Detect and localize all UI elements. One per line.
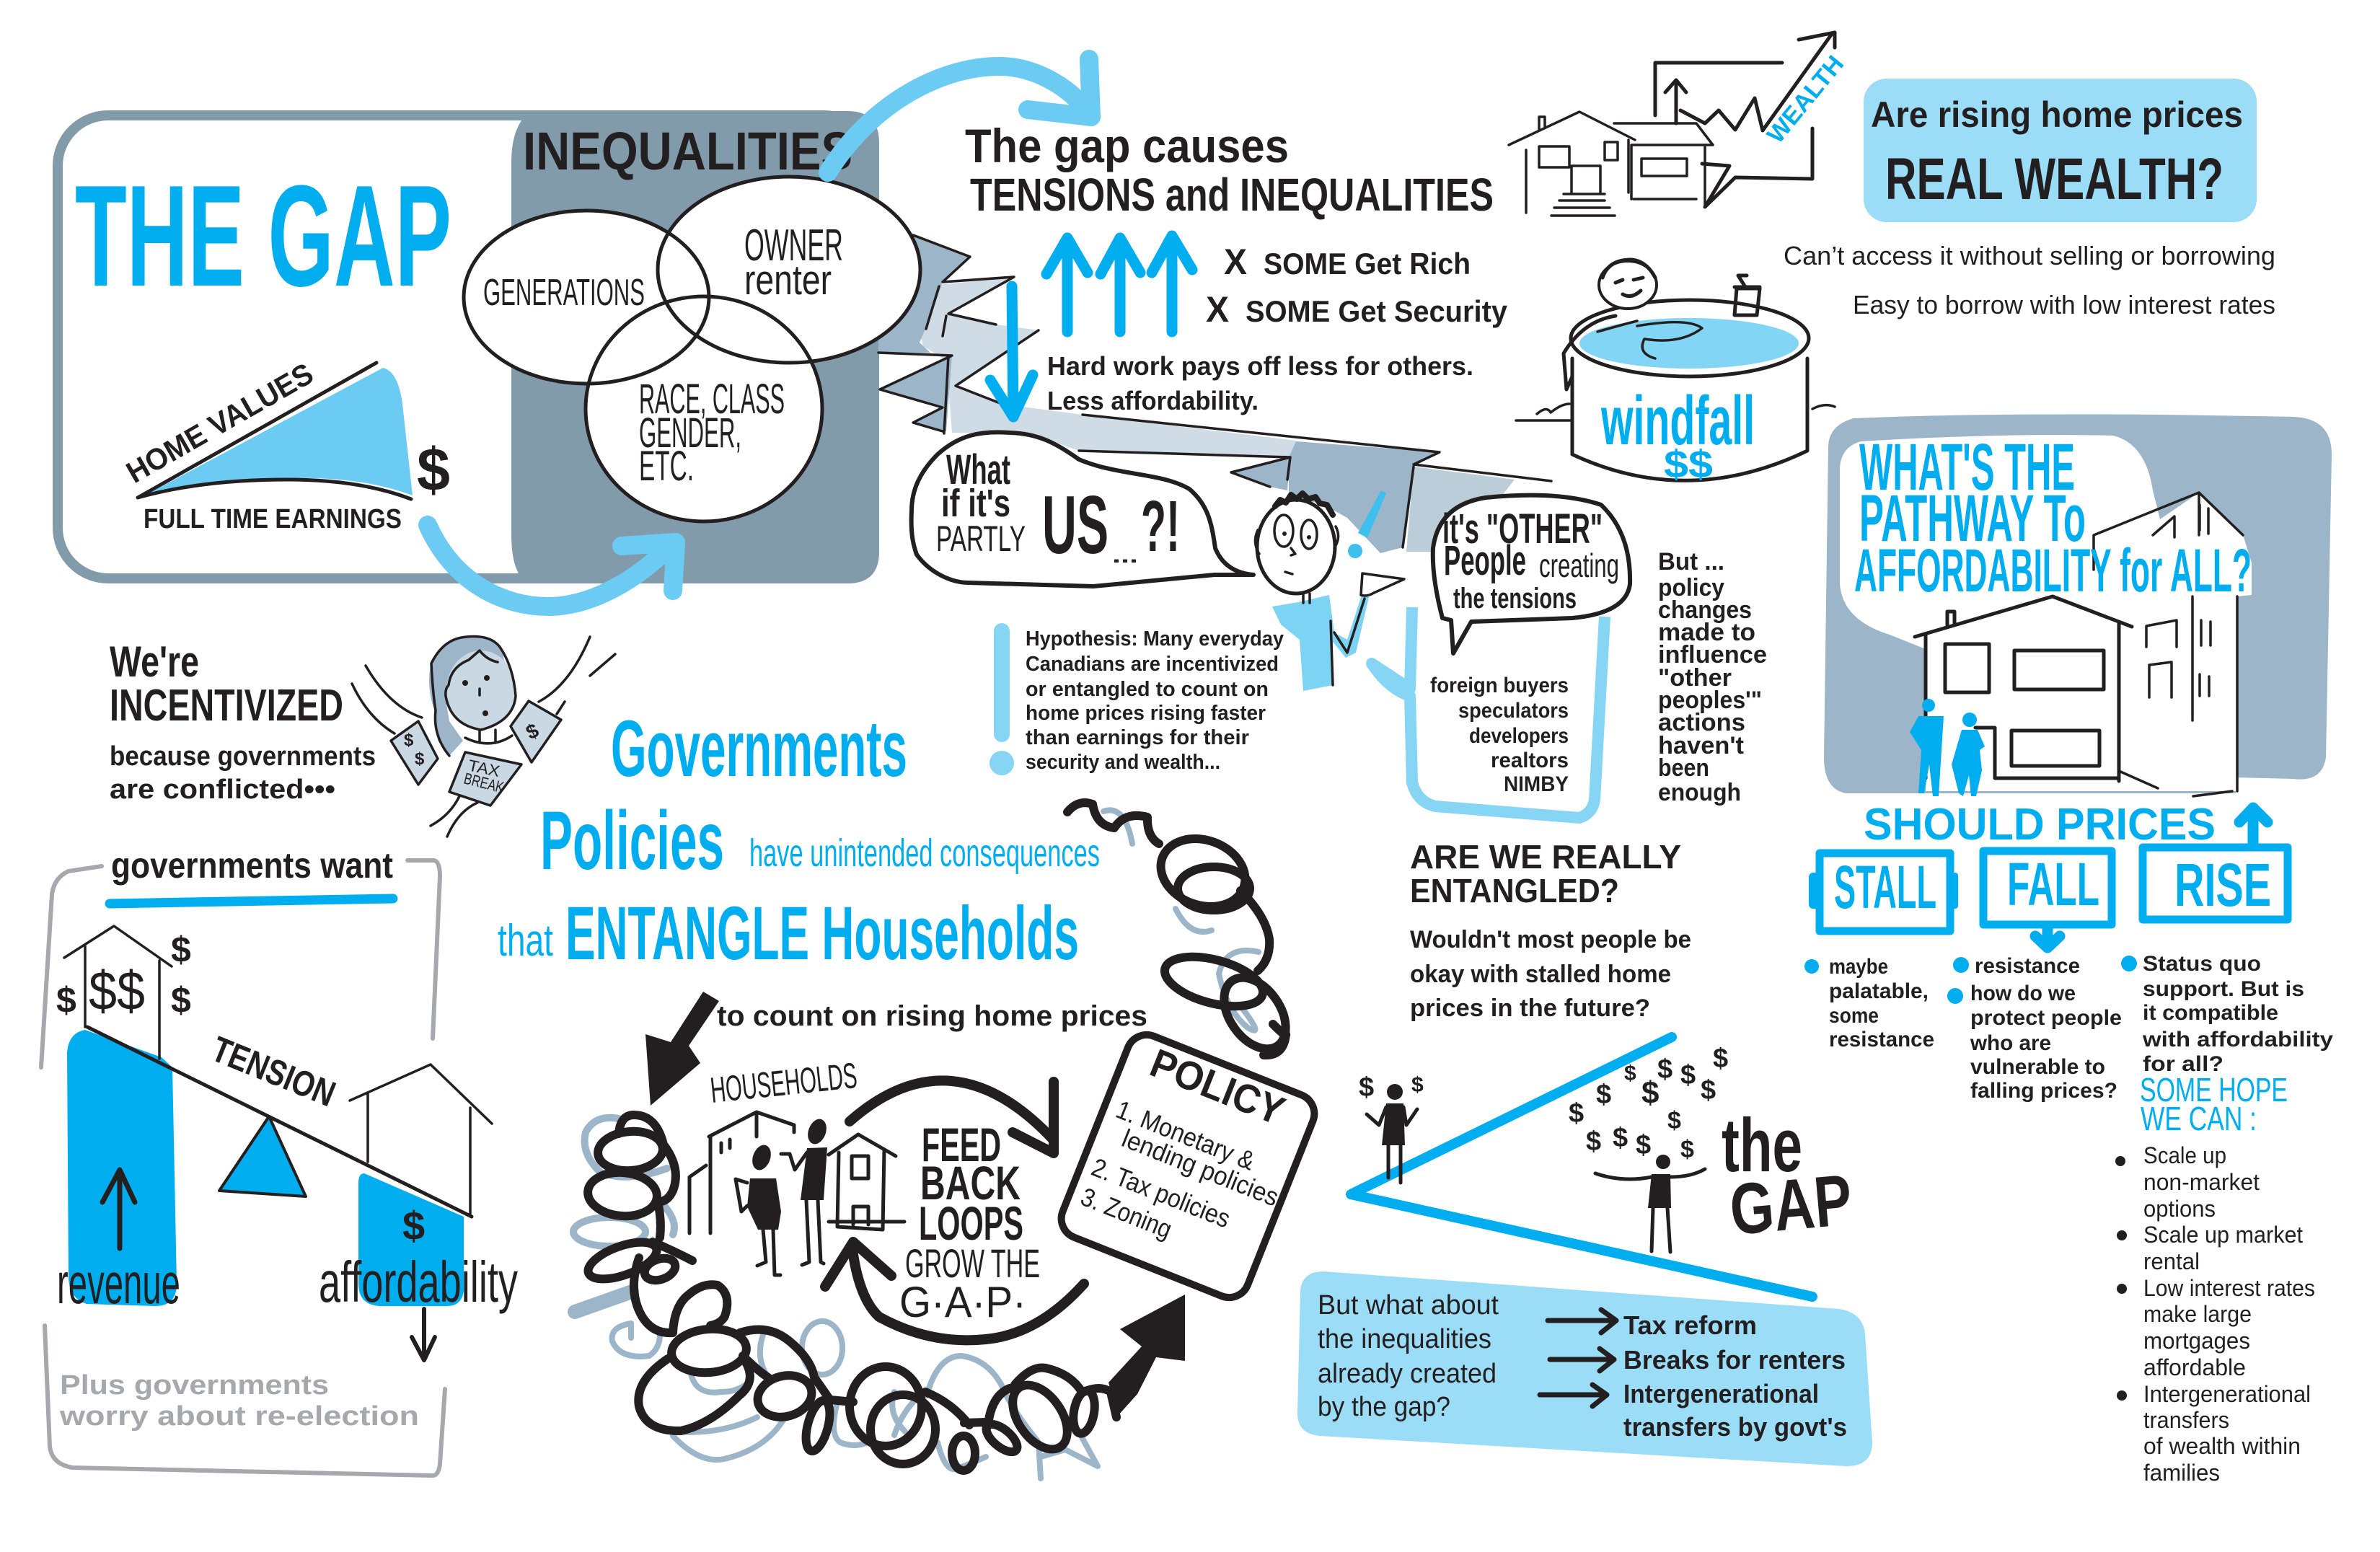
heading: governments policies entangle households: have unintended consequences — [749, 832, 1100, 875]
text: we're incentivized: are conflicted••• — [110, 775, 335, 805]
text: hard work: Less affordability. — [1047, 386, 1259, 415]
text: we're incentivized: INCENTIVIZED — [110, 681, 343, 731]
text: but policy changes: peoples'" — [1658, 687, 1762, 714]
panel: pathway to affordability — [1824, 414, 2332, 796]
list: other people: NIMBY — [1504, 772, 1569, 796]
label: the gap: the — [1722, 1103, 1802, 1188]
text: wealth notes — [1784, 241, 2275, 319]
list: stall notes: resistance — [1829, 1028, 1934, 1051]
arrow: policy to households — [645, 992, 719, 1106]
heading: governments policies entangle households: ENTANGLE Households — [565, 891, 1079, 976]
box: fall: FALL — [2007, 850, 2099, 918]
house and wealth illustration — [1509, 32, 1849, 216]
list: fall notes — [1947, 954, 2122, 1103]
icon: big person with dollars: $ — [1624, 1062, 1636, 1085]
bar: affordability — [358, 1173, 464, 1306]
heading: are we really entangled: ARE WE REALLY — [1410, 838, 1681, 876]
icon: dollar sign: $ — [417, 436, 450, 503]
speech bubble: it's other people: People — [1444, 537, 1526, 584]
text: hypothesis: or entangled to count on — [1026, 678, 1269, 701]
illustration: small house — [829, 1134, 904, 1230]
list: rise notes: Status quo — [2143, 952, 2261, 976]
label: windfall: windfall — [1600, 382, 1755, 459]
text: hypothesis: than earnings for their — [1026, 726, 1249, 749]
illustration: gray scribbles — [573, 810, 1259, 1478]
chart: tilted beam — [87, 1027, 472, 1217]
icon: hair and face — [1603, 260, 1655, 296]
list: some get rich: SOME Get Rich — [1264, 247, 1471, 281]
icon: person in tub — [1599, 261, 1657, 309]
icon: big person with dollars: $ — [1657, 1054, 1672, 1085]
speech bubble: what if it's us: ?! — [1141, 486, 1180, 567]
heading: some hope we can: WE CAN : — [2141, 1100, 2257, 1137]
icon: house with dollars: $ — [56, 980, 76, 1020]
panel frame — [41, 860, 445, 1476]
heading: governments want: governments want — [111, 845, 393, 886]
box: rise: RISE — [2174, 851, 2271, 919]
box: fall — [1983, 850, 2112, 948]
text: wealth notes: Easy to borrow with low interest rates — [1853, 290, 2275, 319]
list: fall notes: resistance — [1975, 954, 2080, 978]
list: other people: speculators — [1458, 699, 1569, 723]
icon: small person: $ — [1411, 1073, 1424, 1097]
label: race, class, gender: GENDER, — [639, 410, 741, 457]
icon: arm on tub rim — [1564, 316, 1616, 389]
list: some get rich: SOME Get Security — [1246, 294, 1508, 328]
heading: the gap: THE GAP — [75, 156, 451, 317]
illustration: black tangle — [583, 803, 1298, 1471]
heading: the gap causes tensions: TENSIONS and INEQUALITIES — [970, 169, 1494, 221]
label: generations: GENERATIONS — [483, 272, 645, 314]
illustration: buildings — [689, 1112, 794, 1233]
heading: what's the pathway — [1854, 431, 2252, 604]
list: some get rich: X — [1206, 289, 1229, 330]
text: but policy changes: made to — [1658, 619, 1755, 646]
text: wealth notes: Can’t access it without selling or borrowing — [1784, 241, 2275, 270]
icon: exclamation mark — [990, 623, 1014, 775]
panel: inequalities background — [511, 111, 879, 583]
list: rise notes: it compatible — [2143, 1001, 2278, 1025]
icon: drink — [1735, 275, 1760, 315]
box: rise — [2143, 847, 2288, 920]
arrow: gap to inequalities — [428, 525, 676, 607]
heading: governments policies entangle households: Governments — [611, 705, 907, 793]
panel frame — [58, 115, 874, 578]
crack illustration — [878, 235, 1551, 553]
callout: inequalities already created: But what about — [1318, 1290, 1499, 1320]
label: renter: renter — [744, 257, 832, 304]
callout: inequalities already created: Intergenerational — [1623, 1379, 1819, 1408]
icon: triangle fulcrum — [219, 1116, 306, 1196]
panel: governments want balance — [41, 845, 518, 1476]
label: race, class, gender: RACE, CLASS — [639, 376, 785, 423]
list: fall notes: falling prices? — [1970, 1079, 2117, 1103]
list: hope measures: Intergenerational — [2143, 1381, 2311, 1407]
label: wealth: WEALTH — [1762, 50, 1849, 149]
text: re-election: worry about re-election — [59, 1401, 419, 1432]
text: re-election — [59, 1370, 419, 1432]
label: revenue: revenue — [57, 1251, 180, 1315]
callout: inequalities already created: Tax reform — [1623, 1310, 1757, 1340]
icon: big person with dollars: $ — [1701, 1075, 1716, 1106]
heading: some hope we can: SOME HOPE — [2140, 1071, 2288, 1108]
icon: up arrow — [102, 1170, 135, 1248]
icon: small person: $ — [1359, 1072, 1374, 1103]
heading: what's the pathway: WHAT'S THE — [1859, 431, 2075, 504]
text: feedback loops grow the gap: BACK — [920, 1156, 1021, 1209]
list: hope measures — [2115, 1142, 2315, 1486]
text: hypothesis: Canadians are incentivized — [1026, 653, 1279, 676]
label: race, class, gender: ETC. — [639, 443, 694, 490]
icon: right money — [511, 701, 561, 762]
arrow: inequalities to tensions — [828, 59, 1091, 172]
icon: tax break paper: BREAK — [462, 770, 506, 796]
icon: big person with dollars: $ — [1667, 1107, 1681, 1134]
illustration: tall building — [2094, 493, 2243, 796]
illustration: house — [1915, 596, 2132, 781]
speech bubble: it's other people: the tensions — [1453, 583, 1577, 614]
text: but policy changes: haven't — [1658, 732, 1744, 759]
list: hope measures: non-market — [2143, 1169, 2260, 1195]
text: we're incentivized: because governments — [110, 741, 376, 772]
text: but policy changes: policy — [1658, 574, 1724, 601]
text: hard work: Hard work pays off less for others. — [1047, 351, 1473, 381]
callout: inequalities already created: transfers by govt's — [1623, 1412, 1847, 1442]
icon: house with dollars: $ — [171, 980, 191, 1020]
list: stall notes: maybe — [1829, 955, 1888, 979]
text: feedback loops grow the gap — [899, 1118, 1040, 1326]
callout: inequalities already created — [1297, 1271, 1872, 1466]
text: we're incentivized: We're — [110, 638, 199, 686]
list: hope measures: Scale up — [2143, 1142, 2226, 1168]
callout: inequalities already created: the inequalities — [1318, 1324, 1491, 1354]
speech bubble: what if it's us: PARTLY — [936, 519, 1026, 559]
list: other people — [1430, 674, 1569, 796]
icon: house with dollars: $ — [171, 930, 191, 970]
label: owner: OWNER — [744, 221, 843, 270]
list: policies: 2. Tax policies — [1088, 1152, 1235, 1233]
text: but policy changes: been — [1658, 754, 1709, 782]
icon: two people — [1910, 699, 1985, 796]
heading: governments policies entangle households: that — [498, 916, 553, 966]
heading: the gap causes tensions: The gap causes — [965, 119, 1289, 172]
icon: big person with dollars: $ — [1680, 1136, 1694, 1163]
text: hypothesis — [1026, 627, 1284, 774]
list: hope measures: mortgages — [2143, 1328, 2250, 1354]
speech bubble: it's other people: it's "OTHER" — [1442, 506, 1603, 552]
list: policies — [1077, 1094, 1283, 1244]
icon: big person with dollars: $ — [1641, 1075, 1659, 1111]
speech bubble: what if it's us: What — [946, 446, 1010, 493]
arrow: fall down — [2035, 926, 2060, 948]
box: stall — [1809, 853, 1958, 931]
icon: right money: $ — [522, 719, 542, 744]
text: feedback loops grow the gap: LOOPS — [919, 1196, 1023, 1250]
text: hypothesis: home prices rising faster — [1026, 702, 1266, 725]
text: feedback loops grow the gap: G·A·P· — [899, 1278, 1026, 1326]
label: households: HOUSEHOLDS — [708, 1055, 859, 1111]
text: re-election: Plus governments — [60, 1370, 329, 1401]
box: stall: STALL — [1834, 853, 1936, 921]
text: we're incentivized — [110, 638, 376, 805]
icon: big person with dollars — [1569, 1044, 1728, 1252]
list: other people: developers — [1469, 724, 1569, 748]
panel: policy card — [1055, 1029, 1321, 1303]
icon: arrows to remedies — [1540, 1310, 1616, 1406]
callout: are rising home prices real wealth: REAL WEALTH? — [1885, 146, 2223, 212]
panel: venn diagram — [464, 177, 920, 521]
icon: big person with dollars: $ — [1596, 1080, 1611, 1110]
speech bubble: what if it's us — [912, 432, 1253, 586]
speech bubble: other people list — [1372, 607, 1605, 818]
text: but policy changes: changes — [1658, 596, 1752, 624]
heading: are we really entangled — [1410, 838, 1681, 909]
text: but policy changes: "other — [1658, 664, 1732, 692]
icon: tax break paper — [449, 752, 521, 806]
text: but policy changes: influence — [1658, 641, 1767, 669]
list: rise notes: for all? — [2143, 1052, 2223, 1076]
label: tension: TENSION — [206, 1028, 341, 1114]
icon: big person with dollars: $ — [1613, 1123, 1628, 1153]
list: hope measures: Scale up market — [2143, 1222, 2303, 1248]
text: but policy changes: But ... — [1658, 548, 1724, 576]
list: stall notes: palatable, — [1829, 979, 1929, 1003]
text: stalled prices question: Wouldn't most people be — [1410, 926, 1691, 953]
arrow: rise up — [2239, 808, 2267, 845]
callout: inequalities already created: already created — [1318, 1359, 1497, 1389]
heading: inequalities: INEQUALITIES — [523, 121, 852, 181]
speech bubble: it's other people — [1433, 495, 1630, 653]
list: rise notes: support. But is — [2143, 977, 2304, 1001]
chart: home values versus full time earnings — [120, 356, 450, 534]
text: stalled prices question: okay with stalled home — [1410, 961, 1671, 988]
label: dollars: $$ — [1664, 443, 1713, 486]
icon: tax break paper: TAX — [467, 756, 502, 780]
heading: governments policies entangle households: Policies — [540, 795, 724, 887]
list: policies: 3. Zoning — [1077, 1181, 1176, 1244]
text: feedback loops grow the gap: FEED — [922, 1118, 1001, 1171]
icon: house with dollars: $$ — [89, 961, 145, 1022]
text: to count on rising home prices: to count on rising home prices — [717, 1000, 1147, 1032]
list: other people: realtors — [1491, 749, 1569, 772]
text: hard work — [1047, 351, 1473, 415]
heading: some hope we can — [2140, 1071, 2288, 1137]
label: race, class, gender — [639, 376, 785, 490]
list: hope measures: make large — [2143, 1301, 2252, 1327]
text: feedback loops grow the gap: GROW THE — [905, 1240, 1040, 1286]
list: hope measures: families — [2143, 1460, 2220, 1486]
list: stall notes — [1804, 955, 1934, 1051]
list: fall notes: protect people — [1970, 1006, 2122, 1030]
panel: the gap and inequalities — [58, 111, 879, 583]
list: fall notes: vulnerable to — [1970, 1055, 2105, 1079]
icon: big person with dollars: $ — [1586, 1126, 1601, 1157]
list: hope measures: affordable — [2143, 1354, 2246, 1380]
speech bubble: it's other people: creating — [1539, 547, 1619, 584]
illustration: confused person — [1255, 490, 1404, 691]
label: the gap: GAP — [1727, 1160, 1855, 1251]
label: the gap — [1722, 1103, 1855, 1251]
list: hope measures: of wealth within — [2143, 1433, 2301, 1459]
label: affordability: affordability — [319, 1250, 518, 1314]
text: but policy changes: actions — [1658, 709, 1745, 736]
heading: policy: POLICY — [1145, 1040, 1291, 1134]
icon: big person with dollars: $ — [1713, 1044, 1728, 1074]
list: some get rich — [1206, 242, 1508, 330]
list: hope measures: rental — [2143, 1248, 2200, 1274]
illustration: windfall hot tub — [1516, 260, 1835, 486]
illustration: woman with tax breaks — [352, 637, 615, 837]
list: rise notes: with affordability — [2142, 1028, 2333, 1051]
list: policies: lending policies — [1118, 1123, 1283, 1212]
list: hope measures: options — [2143, 1196, 2216, 1222]
list: policies: 1. Monetary & — [1112, 1094, 1259, 1176]
icon: big person with dollars: $ — [1636, 1130, 1651, 1160]
list: hope measures: Low interest rates — [2143, 1275, 2315, 1301]
icon: empty house — [350, 1064, 492, 1214]
list: fall notes: who are — [1970, 1031, 2051, 1055]
icon: left money: $ — [415, 749, 425, 769]
speech bubble: what if it's us: if it's — [941, 482, 1010, 525]
arrows: feedback loop — [825, 1080, 1084, 1340]
icon: down arrow — [990, 286, 1033, 417]
list: stall notes: some — [1829, 1004, 1879, 1028]
text: stalled prices question — [1410, 926, 1691, 1022]
heading: are we really entangled: ENTANGLED? — [1410, 872, 1619, 909]
callout: are rising home prices real wealth — [1864, 79, 2257, 222]
icon: big person with dollars: $ — [1569, 1098, 1584, 1129]
text: but policy changes: enough — [1658, 779, 1741, 806]
label: home values: HOME VALUES — [120, 356, 319, 490]
list: fall notes: how do we — [1970, 982, 2076, 1005]
illustration: two people — [736, 1116, 829, 1275]
bar: revenue — [67, 1030, 177, 1306]
speech bubble: what if it's us: ... — [1112, 544, 1138, 568]
icon: left money: $ — [404, 731, 414, 750]
icon: down arrow — [412, 1309, 435, 1360]
arrow: households to policy — [1109, 1295, 1185, 1416]
callout: are rising home prices real wealth: Are rising home prices — [1871, 94, 2243, 135]
icon: three up arrows — [1046, 236, 1192, 332]
text: hypothesis: Hypothesis: Many everyday — [1026, 627, 1284, 651]
icon: small person — [1359, 1072, 1424, 1183]
icon: house with dollars — [56, 926, 191, 1059]
list: rise notes — [2121, 952, 2333, 1076]
speech bubble: what if it's us: US — [1042, 480, 1109, 571]
heading: should prices: SHOULD PRICES — [1864, 800, 2216, 850]
list: hope measures: transfers — [2143, 1407, 2229, 1433]
icon: dollar sign: $ — [402, 1203, 425, 1248]
underline — [110, 899, 393, 904]
text: but policy changes — [1658, 548, 1767, 806]
icon: blue exclamation — [1348, 490, 1386, 558]
text: stalled prices question: prices in the future? — [1410, 995, 1650, 1022]
callout: inequalities already created: Breaks for renters — [1623, 1345, 1846, 1375]
list: some get rich: X — [1224, 242, 1247, 282]
chart: gap wedge — [1351, 1037, 1855, 1297]
list: other people: foreign buyers — [1430, 674, 1569, 697]
icon: left money — [391, 721, 438, 785]
callout: inequalities already created: by the gap? — [1318, 1392, 1450, 1422]
heading: what's the pathway: PATHWAY To — [1859, 482, 2086, 555]
heading: governments policies entangle households — [498, 705, 1100, 976]
text: hypothesis: security and wealth... — [1026, 751, 1220, 774]
heading: the gap causes tensions — [965, 119, 1494, 221]
label: full time earnings: FULL TIME EARNINGS — [144, 504, 402, 534]
icon: big person with dollars: $ — [1680, 1060, 1696, 1090]
